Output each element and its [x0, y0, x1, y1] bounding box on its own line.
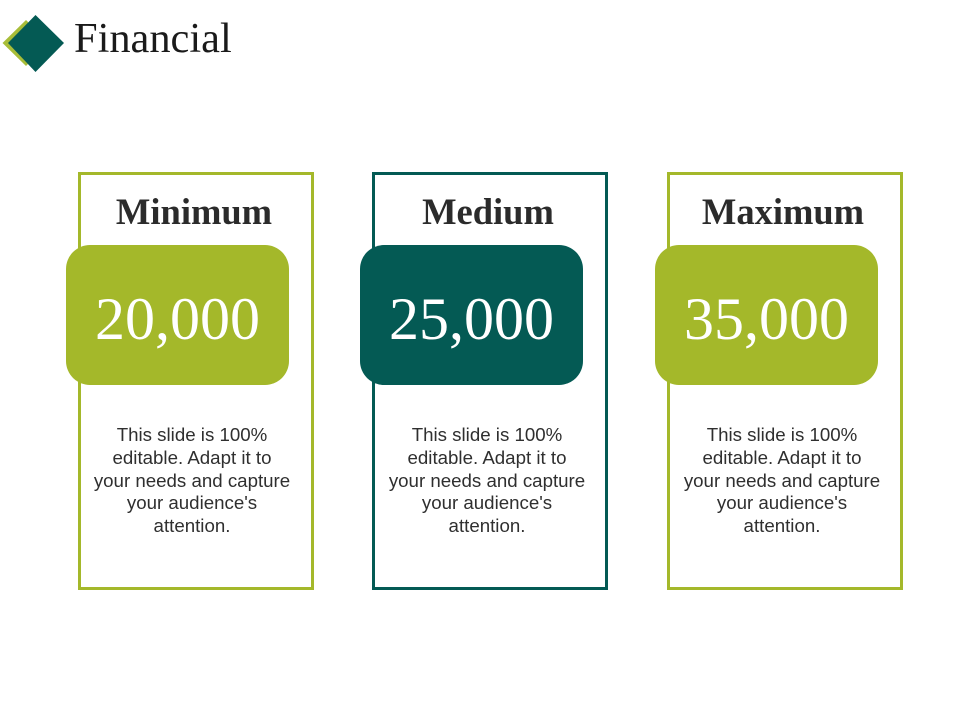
text: medium description — [389, 424, 585, 536]
title: Financial — [74, 15, 232, 62]
text: minimum description: your needs and capture — [94, 470, 290, 491]
panel: minimum — [66, 172, 314, 590]
text: minimum description: attention. — [154, 515, 230, 536]
value: 35,000 — [655, 245, 878, 385]
text: minimum description: editable. Adapt it to — [113, 447, 271, 468]
text: minimum description: This slide is 100% — [117, 424, 267, 445]
text: maximum description: attention. — [744, 515, 820, 536]
text: medium description: your needs and capture — [389, 470, 585, 491]
text: medium description: editable. Adapt it to — [408, 447, 566, 468]
heading: maximum: Maximum — [702, 191, 864, 232]
text: maximum description: This slide is 100% — [707, 424, 857, 445]
panel: medium — [360, 172, 608, 590]
text: maximum description: your needs and capture — [684, 470, 880, 491]
text: minimum description: your audience's — [127, 492, 257, 513]
value: 25,000 — [360, 245, 583, 385]
panel: maximum — [655, 172, 903, 590]
text: maximum description: editable. Adapt it to — [703, 447, 861, 468]
text: medium description: your audience's — [422, 492, 552, 513]
heading: minimum: Minimum — [116, 191, 272, 232]
text: medium description: attention. — [449, 515, 525, 536]
text: minimum description — [94, 424, 290, 536]
icon: diamond — [2, 15, 64, 72]
text: maximum description: your audience's — [717, 492, 847, 513]
text: maximum description — [684, 424, 880, 536]
value: 20,000: 20,000 — [95, 286, 260, 352]
value: 35,000: 35,000 — [684, 286, 849, 352]
text: medium description: This slide is 100% — [412, 424, 562, 445]
value: 20,000 — [66, 245, 289, 385]
heading: medium: Medium — [422, 191, 554, 232]
value: 25,000: 25,000 — [389, 286, 554, 352]
